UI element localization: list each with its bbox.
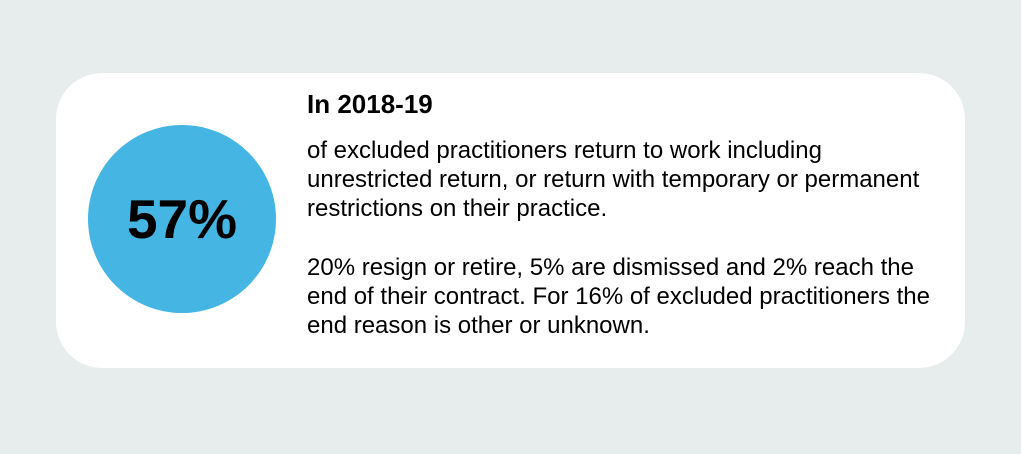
- panel: card: [56, 73, 965, 368]
- text block: unrestricted return, or return with temporary or permanent: [307, 166, 919, 193]
- text block: end reason is other or unknown.: [307, 312, 650, 339]
- text block: end of their contract. For 16% of excluded practitioners the: [307, 283, 930, 310]
- heading: In 2018-19: [307, 89, 433, 119]
- icon: 57% circle: 57%: [127, 188, 237, 250]
- text block: of excluded practitioners return to work including: [307, 137, 822, 164]
- text block: [307, 137, 930, 339]
- icon: 57% circle: [88, 125, 276, 313]
- text block: 20% resign or retire, 5% are dismissed and 2% reach the: [307, 254, 914, 281]
- text block: restrictions on their practice.: [307, 195, 607, 222]
